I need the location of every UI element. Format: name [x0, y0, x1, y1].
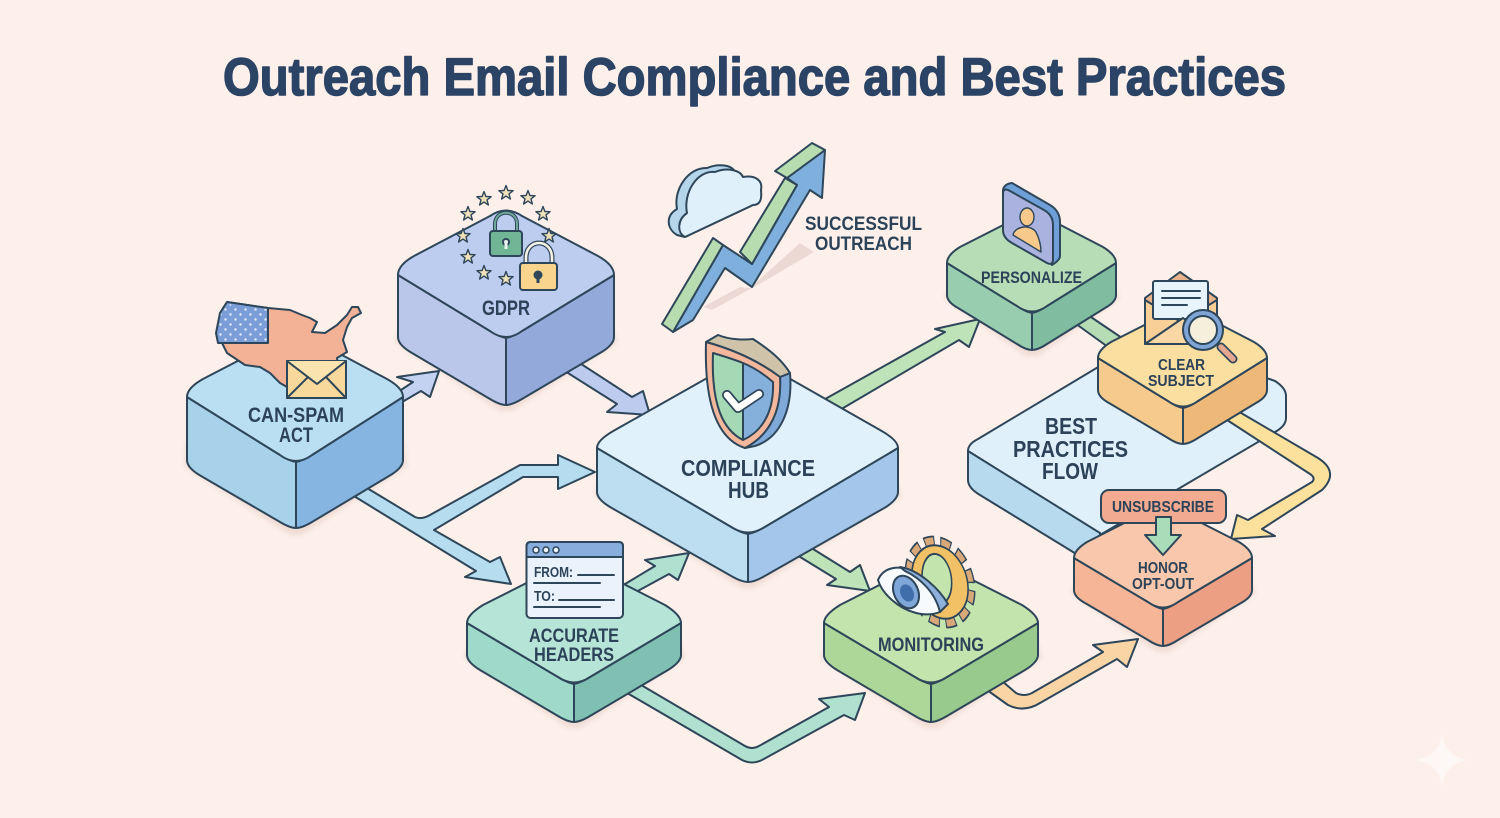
top face [187, 334, 403, 461]
honor opt-out label [1132, 560, 1194, 593]
platform top face [968, 336, 1286, 535]
arrow: CAN-SPAM branching to hub and accurate headers [349, 455, 595, 584]
clear subject label: SUBJECT [1148, 373, 1214, 390]
left face [398, 275, 506, 405]
sparkle watermark [1416, 734, 1468, 786]
right face [748, 448, 898, 582]
iris [888, 572, 924, 612]
panel: CAN-SPAM Act block [187, 334, 403, 528]
cloud front [679, 170, 761, 237]
lens rim [1183, 310, 1223, 350]
window dots [533, 547, 559, 553]
envelope back flap [1145, 272, 1217, 320]
honor opt-out label: HONOR [1138, 560, 1188, 577]
eye lid [900, 567, 948, 612]
arrow green top faces [662, 143, 825, 332]
platform left face [968, 451, 1100, 570]
panel: personalize block [947, 213, 1116, 350]
arrow: monitoring to honor opt-out [980, 639, 1138, 709]
icon: eye [878, 567, 948, 614]
panel: clear subject block [1098, 308, 1267, 444]
right face [574, 623, 681, 722]
left face [824, 623, 931, 722]
clear subject label [1148, 357, 1214, 390]
panel: GDPR block [398, 210, 614, 405]
CAN-SPAM label [248, 404, 344, 447]
arrow: accurate headers to hub [615, 553, 689, 598]
panel: honor opt-out block [1074, 506, 1252, 646]
monitoring label: MONITORING [878, 635, 984, 656]
right face [931, 623, 1038, 722]
left face [467, 623, 574, 722]
label: successful outreach: SUCCESSFUL [805, 214, 922, 235]
window frame [526, 542, 623, 618]
panel: accurate headers block [467, 562, 681, 722]
shield inner blue half [743, 363, 773, 440]
icon: green padlock [490, 213, 522, 256]
hub label: HUB [728, 477, 769, 503]
field lines [534, 575, 614, 607]
icon: successful outreach rising arrow [662, 143, 825, 332]
right face [506, 275, 614, 405]
top face [398, 210, 614, 337]
honor opt-out label: OPT-OUT [1132, 576, 1194, 593]
map outline [217, 302, 361, 392]
pupil [897, 582, 917, 604]
icon: envelope [287, 361, 346, 398]
from field: FROM: [534, 565, 573, 581]
lens glass [1189, 316, 1217, 344]
shield side [745, 373, 790, 448]
icon: United States map with flag [216, 302, 361, 392]
arrow: CAN-SPAM to GDPR [395, 371, 439, 405]
arrow: unsubscribe to honor opt-out [1145, 517, 1181, 555]
icon: profile card [1003, 183, 1060, 265]
unsubscribe button [1101, 490, 1226, 523]
clear subject label: CLEAR [1158, 357, 1205, 374]
card edge [1003, 183, 1060, 265]
CAN-SPAM label: ACT [279, 424, 313, 447]
arrow: hub to personalize [818, 319, 980, 414]
eye white [878, 568, 940, 614]
letter [1153, 281, 1208, 319]
panel: best practices flow platform [968, 336, 1286, 570]
top face [947, 213, 1116, 312]
top face [597, 358, 898, 532]
top face [1074, 506, 1252, 608]
icon: yellow padlock [520, 243, 557, 290]
person body [1013, 227, 1041, 252]
check mark [727, 394, 759, 408]
left face [947, 263, 1032, 350]
platform label: PRACTICES [1013, 436, 1128, 462]
accurate headers label: HEADERS [534, 645, 614, 666]
card face [1003, 190, 1053, 264]
platform label [1013, 413, 1128, 484]
GDPR label: GDPR [482, 297, 530, 320]
accurate headers label [529, 626, 619, 666]
right face [1163, 558, 1252, 646]
arrow: accurate headers to monitoring [622, 682, 865, 762]
personalize label: PERSONALIZE [981, 268, 1082, 287]
accurate headers label: ACCURATE [529, 626, 619, 647]
icon: magnifying glass [1183, 310, 1233, 359]
cloud back [669, 165, 753, 237]
arrow blue face [673, 150, 825, 332]
panel: compliance hub block [597, 358, 898, 582]
block ground shadows [184, 270, 1256, 728]
icon: gear [910, 536, 970, 628]
top face [467, 562, 681, 682]
gear teeth outline [910, 536, 970, 628]
gear hole [922, 550, 952, 608]
icon: open envelope with letter [1145, 272, 1217, 344]
person head [1020, 208, 1034, 226]
envelope body [1145, 300, 1217, 344]
flag canton [216, 302, 268, 343]
shield top rim [706, 335, 790, 377]
panel: monitoring block [824, 562, 1038, 722]
arrow: personalize to clear subject [1072, 313, 1122, 347]
hub label: COMPLIANCE [681, 455, 815, 481]
letter lines [1162, 291, 1200, 305]
icon: shield with check mark [706, 335, 790, 448]
CAN-SPAM label: CAN-SPAM [248, 404, 344, 427]
top face [1098, 308, 1267, 406]
arrow: GDPR to compliance hub [560, 360, 650, 415]
handle [1221, 347, 1233, 359]
flag stars [218, 304, 267, 342]
label: successful outreach [805, 214, 922, 255]
to field: TO: [534, 589, 555, 605]
right face [296, 397, 403, 528]
left face [1074, 558, 1163, 646]
arrow: clear subject to honor opt-out [1224, 410, 1330, 539]
platform label: FLOW [1042, 458, 1098, 484]
icon: cloud [669, 165, 761, 237]
gear body [912, 539, 968, 625]
shield front rim [706, 342, 780, 448]
left face [1098, 358, 1183, 444]
top face [824, 562, 1038, 682]
arrow: hub to monitoring [792, 544, 870, 591]
hub label [681, 455, 815, 503]
window title bar [526, 542, 623, 557]
unsubscribe button: UNSUBSCRIBE [1112, 499, 1214, 516]
title: Outreach Email Compliance and Best Practices [223, 48, 1286, 107]
shield inner green half [713, 353, 743, 440]
label: successful outreach: OUTREACH [815, 234, 912, 255]
icon: email header window [526, 542, 623, 618]
left face [597, 448, 748, 582]
left face [187, 397, 296, 528]
gear teeth fill [910, 536, 970, 628]
icon: EU star ring [456, 186, 556, 285]
right face [1032, 263, 1116, 350]
arrow ground shadow [703, 243, 814, 310]
envelope front flap [1145, 318, 1217, 344]
platform label: BEST [1045, 413, 1097, 439]
right face [1183, 358, 1267, 444]
